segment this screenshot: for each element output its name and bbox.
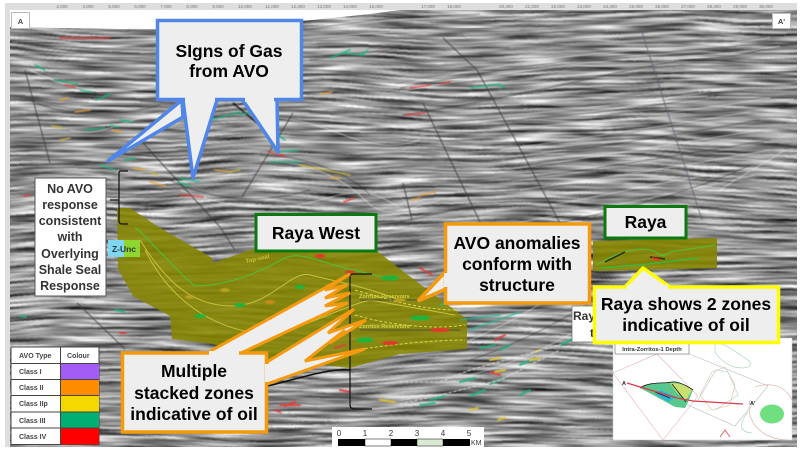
- axis strips and top white water area: 29,000: [733, 4, 747, 9]
- callout: signs of gas from AVO: from AVO: [189, 61, 269, 81]
- yellow highlight: Raya West zone: Top-seal: [245, 254, 270, 265]
- legend: AVO type colours: Class III: [19, 418, 46, 425]
- scale bar: 0: [337, 429, 342, 438]
- inset map: Intra-Zorritos-1 Depth: A': [750, 401, 756, 407]
- callout: Raya shows 2 zones: Raya shows 2 zones: [601, 294, 771, 314]
- scattered anomalies in lower section: [20, 245, 575, 435]
- callout: AVO anomalies conform with structure: conform with: [462, 254, 572, 274]
- axis strips and top white water area: 23,000: [577, 4, 591, 9]
- scale bar: 3: [415, 429, 420, 438]
- axis strips and top white water area: 18,000: [447, 4, 461, 9]
- note: no AVO response: Response: [40, 279, 100, 293]
- yellow highlight: Raya West zone: Zorritos Reservoirs: [359, 294, 410, 300]
- contoured structure on map: [640, 382, 693, 408]
- note: no AVO response: Overlying: [41, 247, 99, 261]
- note: no AVO response: with: [56, 230, 82, 244]
- yellow highlight: Raya West zone: [117, 208, 467, 368]
- axis strips and top white water area: 15,000: [369, 4, 383, 9]
- axis strips and top white water area: 11,000: [265, 4, 279, 9]
- label: Z-Unc: Z-Unc: [112, 244, 136, 254]
- axis strips and top white water area: 26,000: [655, 4, 669, 9]
- inset map: Intra-Zorritos-1 Depth: [613, 338, 792, 440]
- axis strips and top white water area: 8,000: [186, 4, 198, 9]
- callout: multiple stacked zones indicative of oil: indicative of oil: [130, 404, 258, 424]
- legend: AVO type colours: Class IV: [19, 434, 47, 441]
- note: no AVO response: [35, 178, 106, 296]
- note: no AVO response: consistent: [39, 214, 102, 228]
- callout: AVO anomalies conform with structure: AVO anomalies: [453, 233, 581, 253]
- callout: multiple stacked zones indicative of oil: [122, 274, 366, 432]
- scale bar: KM: [471, 440, 482, 447]
- scale bar: [332, 427, 484, 447]
- map title: [615, 343, 689, 354]
- label: Z-Unc: [108, 240, 140, 257]
- axis strips and top white water area: 5,000: [108, 4, 120, 9]
- axis strips and top white water area: 24,000: [603, 4, 617, 9]
- horizon lines in Raya West: [135, 227, 465, 350]
- axis strips and top white water area: 27,000: [681, 4, 695, 9]
- legend: AVO type colours: Class IIp: [19, 401, 48, 408]
- axis strips and top white water area: 9,000: [212, 4, 224, 9]
- note: no AVO response: response: [42, 198, 98, 212]
- legend: AVO type colours: Colour: [67, 353, 90, 360]
- scale bar: 1: [363, 429, 368, 438]
- axis strips and top white water area: 4,000: [82, 4, 94, 9]
- seismic reflectors: [12, 14, 785, 375]
- axis strips and top white water area: 22,000: [551, 4, 565, 9]
- callout: signs of gas from AVO: SIgns of Gas: [176, 41, 283, 61]
- axis strips and top white water area: 12,000: [291, 4, 305, 9]
- legend: AVO type colours: Class I: [19, 369, 42, 376]
- map title: Intra-Zorritos-1 Depth: [622, 347, 682, 353]
- legend: AVO type colours: Class II: [19, 385, 44, 392]
- partly hidden label box: t: [590, 326, 594, 340]
- scale bar: 5: [467, 429, 472, 438]
- legend: AVO type colours: [11, 347, 99, 444]
- label: Raya West: Raya West: [272, 223, 360, 243]
- partly hidden label box: [572, 306, 596, 342]
- scale bar: 4: [441, 429, 446, 438]
- callout: multiple stacked zones indicative of oil: stacked zones: [134, 383, 254, 403]
- axis strips and top white water area: 25,000: [629, 4, 643, 9]
- axis strips and top white water area: 6,000: [134, 4, 146, 9]
- axis strips and top white water area: 14,000: [343, 4, 357, 9]
- axis strips and top white water area: 21,000: [525, 4, 539, 9]
- note: no AVO response: Shale Seal: [39, 263, 101, 277]
- anomalies in Raya West: [185, 254, 450, 345]
- callout: AVO anomalies conform with structure: [418, 224, 590, 303]
- AVO anomaly colour dashes: [24, 38, 505, 202]
- callout: signs of gas from AVO: [108, 20, 302, 178]
- partly hidden label box: Ray: [573, 309, 595, 323]
- fault lines: [25, 32, 702, 349]
- axis strips and top white water area: 17,000: [421, 4, 435, 9]
- axis strips and top white water area: 10,000: [238, 4, 252, 9]
- label: Raya: [605, 206, 686, 238]
- label: Raya: Raya: [625, 212, 667, 232]
- axis strips and top white water area: 28,000: [707, 4, 721, 9]
- callout: Raya shows 2 zones: indicative of oil: [622, 315, 750, 335]
- axis strips and top white water area: 3,000: [56, 4, 68, 9]
- yellow highlight: Raya zone: [593, 238, 717, 271]
- callout: multiple stacked zones indicative of oil: Multiple: [161, 361, 227, 381]
- marker: A: [12, 12, 30, 28]
- callout: Raya shows 2 zones: [594, 268, 778, 342]
- axis strips and top white water area: 30,000: [759, 4, 773, 9]
- marker: A': A': [778, 17, 785, 26]
- yellow highlight: Raya West zone: Zorritos Reservoirs: [359, 324, 410, 330]
- label: Raya West: [256, 214, 376, 251]
- brackets: [110, 171, 372, 409]
- axis strips and top white water area: 20,000: [499, 4, 513, 9]
- legend: AVO type colours: AVO Type: [19, 353, 52, 360]
- marker: A': [772, 14, 790, 28]
- note: no AVO response: No AVO: [47, 182, 93, 196]
- scale bar: 2: [389, 429, 394, 438]
- axis strips and top white water area: 13,000: [317, 4, 331, 9]
- axis strips and top white water area: 7,000: [160, 4, 172, 9]
- inset map: Intra-Zorritos-1 Depth: A: [622, 381, 626, 387]
- callout: AVO anomalies conform with structure: structure: [479, 275, 555, 295]
- marker: A: A: [18, 17, 24, 26]
